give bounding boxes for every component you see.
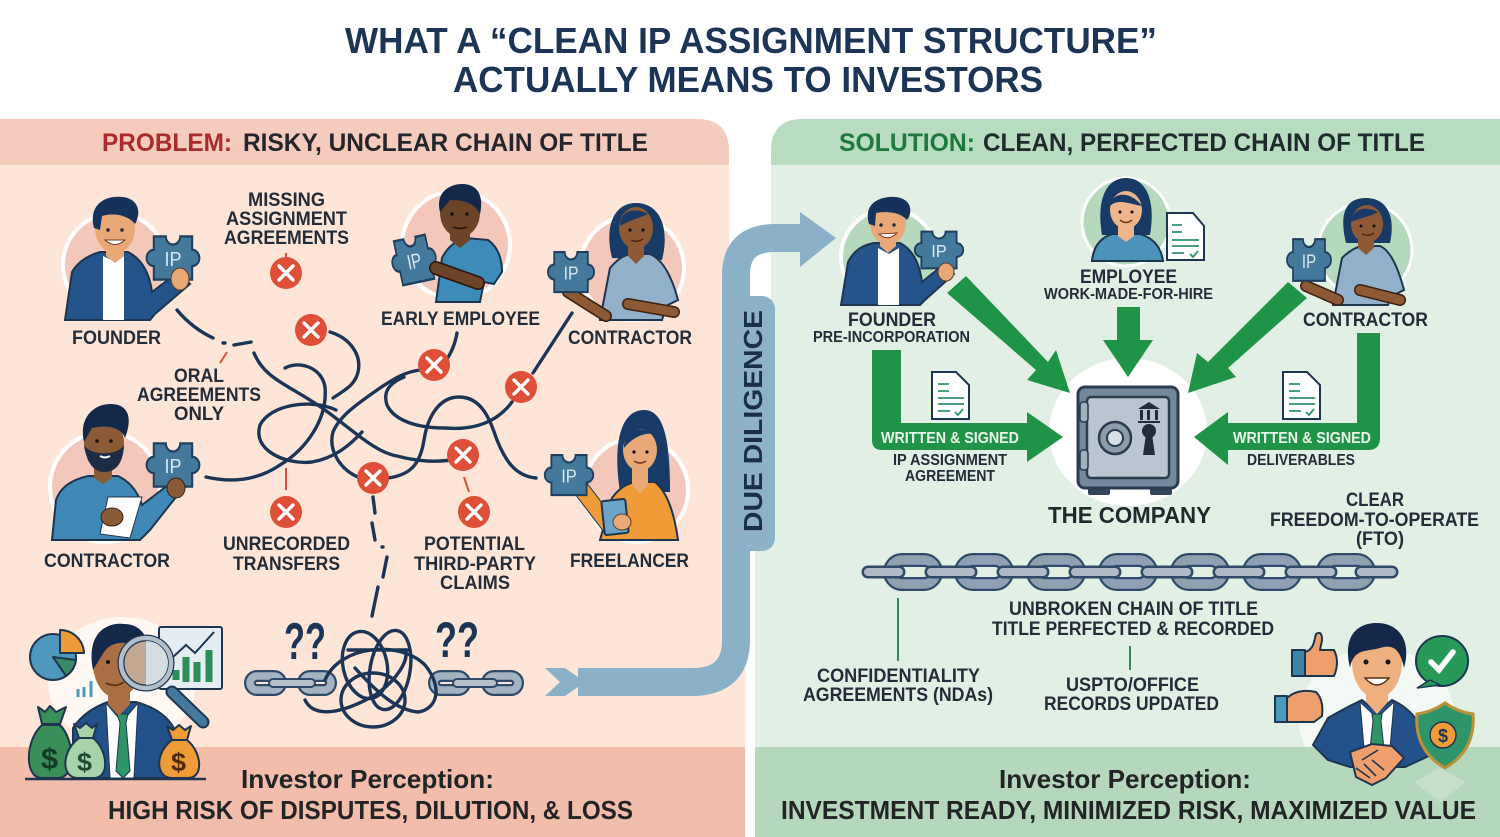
x markers: chain breaks xyxy=(270,257,537,528)
problem labels: FOUNDER xyxy=(72,328,161,349)
person: employee (solution) xyxy=(1082,178,1204,266)
solution labels: RECORDS UPDATED xyxy=(1044,694,1219,715)
icon: value shield xyxy=(1417,703,1473,768)
red connector ticks xyxy=(220,253,469,492)
person: founder (problem) xyxy=(63,197,199,320)
icon: growth chart board xyxy=(78,627,222,697)
arrow: due diligence flow xyxy=(545,212,836,696)
person: founder (solution) xyxy=(841,197,963,305)
icon: broken tangled chain: ?? xyxy=(435,612,479,668)
solution labels xyxy=(803,267,1479,715)
problem heading: PROBLEM: xyxy=(102,129,232,157)
title xyxy=(345,20,1157,100)
solution heading: CLEAN, PERFECTED CHAIN OF TITLE xyxy=(983,129,1425,157)
title: ACTUALLY MEANS TO INVESTORS xyxy=(453,59,1043,100)
problem labels: CLAIMS xyxy=(440,573,510,594)
person: contractor (solution): IP xyxy=(1302,250,1316,272)
solution labels: WORK-MADE-FOR-HIRE xyxy=(1044,286,1213,303)
problem labels: ORAL xyxy=(174,366,224,387)
arrow labels: written and signed: WRITTEN & SIGNED xyxy=(1233,430,1371,447)
solution investor perception text: INVESTMENT READY, MINIMIZED RISK, MAXIMIZED VALUE xyxy=(781,795,1476,825)
problem investor perception text: HIGH RISK OF DISPUTES, DILUTION, & LOSS xyxy=(108,795,633,825)
problem labels: TRANSFERS xyxy=(233,554,340,575)
due diligence pillar: DUE DILIGENCE xyxy=(738,310,768,532)
icon: thumbs up xyxy=(1292,633,1337,676)
icon: unbroken chain xyxy=(868,560,1392,584)
person: contractor woman (problem) xyxy=(548,203,684,320)
investor with magnifying glass and money bags: $ xyxy=(77,747,93,777)
problem labels: ASSIGNMENT xyxy=(226,209,347,230)
person: early employee (problem): IP xyxy=(405,248,424,274)
investor with magnifying glass and money bags: $ xyxy=(171,747,187,777)
icon: magnifying glass xyxy=(121,638,203,722)
solution labels: PRE-INCORPORATION xyxy=(813,329,970,346)
solution labels: USPTO/OFFICE xyxy=(1066,675,1199,696)
solution labels: TITLE PERFECTED & RECORDED xyxy=(992,619,1274,640)
white halo behind safe xyxy=(1049,358,1207,506)
investor with magnifying glass and money bags xyxy=(25,617,222,779)
solution investor perception text: Investor Perception: xyxy=(999,764,1251,794)
icon: signed document xyxy=(1167,213,1204,260)
problem labels: AGREEMENTS xyxy=(137,385,261,406)
title: WHAT A “CLEAN IP ASSIGNMENT STRUCTURE” xyxy=(345,20,1157,61)
solution investor perception band xyxy=(755,747,1500,837)
investor with handshake and approval icons xyxy=(1275,623,1473,802)
icon: IP assignment document xyxy=(932,372,969,419)
arrow labels: written and signed: WRITTEN & SIGNED xyxy=(881,430,1019,447)
solution labels: DELIVERABLES xyxy=(1247,452,1355,469)
problem labels: MISSING xyxy=(248,190,325,211)
solution heading: SOLUTION: xyxy=(839,129,975,157)
solution labels: AGREEMENTS (NDAs) xyxy=(803,685,993,706)
investor with magnifying glass and money bags: $ xyxy=(41,743,58,776)
icon: value shield: $ xyxy=(1438,726,1448,746)
icon: company safe xyxy=(1078,387,1178,495)
person: early employee (problem) xyxy=(388,184,510,302)
solution investor perception text xyxy=(781,764,1476,825)
person: freelancer (problem) xyxy=(545,410,688,542)
green arrows into the company xyxy=(872,276,1380,465)
icon: deliverables document xyxy=(1283,372,1320,419)
solution labels: CLEAR xyxy=(1346,490,1404,511)
icon: money bags xyxy=(29,706,199,778)
solution header band xyxy=(771,119,1500,165)
person: contractor man with beard (problem) xyxy=(50,404,199,542)
problem labels: POTENTIAL xyxy=(424,534,525,555)
problem labels: EARLY EMPLOYEE xyxy=(381,309,540,330)
solution labels: EMPLOYEE xyxy=(1080,267,1177,288)
due diligence pillar xyxy=(728,296,775,551)
problem investor perception text xyxy=(108,764,633,825)
solution labels: AGREEMENT xyxy=(905,468,995,485)
problem heading: RISKY, UNCLEAR CHAIN OF TITLE xyxy=(243,129,648,157)
problem labels: THIRD-PARTY xyxy=(414,554,536,575)
solution labels: (FTO) xyxy=(1356,529,1404,550)
person: freelancer (problem): IP xyxy=(561,466,577,487)
icon: broken tangled chain xyxy=(250,612,518,727)
panel: problem xyxy=(0,119,745,837)
person: founder (solution): IP xyxy=(931,242,947,261)
solution labels: CONTRACTOR xyxy=(1303,310,1428,331)
person: founder (problem): IP xyxy=(164,249,182,271)
tangled chain of title lines xyxy=(177,310,572,616)
problem labels: AGREEMENTS xyxy=(224,228,349,249)
icon: pie chart xyxy=(30,630,84,680)
problem labels xyxy=(44,190,692,594)
icon: approval speech bubble xyxy=(1416,636,1468,688)
problem labels: CONTRACTOR xyxy=(44,551,170,572)
problem investor perception text: Investor Perception: xyxy=(241,764,494,794)
panel: solution xyxy=(755,119,1500,837)
person: contractor (solution) xyxy=(1287,198,1412,305)
solution labels: UNBROKEN CHAIN OF TITLE xyxy=(1009,599,1258,620)
problem labels: CONTRACTOR xyxy=(568,328,692,349)
icon: fist xyxy=(1275,691,1322,722)
icon: broken tangled chain: ?? xyxy=(284,613,326,671)
problem labels: ONLY xyxy=(174,404,224,425)
solution labels: IP ASSIGNMENT xyxy=(893,452,1007,469)
problem labels: FREELANCER xyxy=(570,551,689,572)
problem labels: UNRECORDED xyxy=(223,534,350,555)
problem investor perception band xyxy=(0,747,745,837)
person: contractor man with beard (problem): IP xyxy=(164,456,182,478)
arrow labels: written and signed xyxy=(881,430,1371,447)
solution labels: FREEDOM-TO-OPERATE xyxy=(1270,510,1479,531)
solution labels: THE COMPANY xyxy=(1048,502,1211,528)
solution labels: FOUNDER xyxy=(848,310,936,331)
icon: handshake xyxy=(1350,744,1404,785)
solution labels: CONFIDENTIALITY xyxy=(817,666,980,687)
person: contractor woman (problem): IP xyxy=(564,262,578,284)
problem header band xyxy=(0,119,729,165)
